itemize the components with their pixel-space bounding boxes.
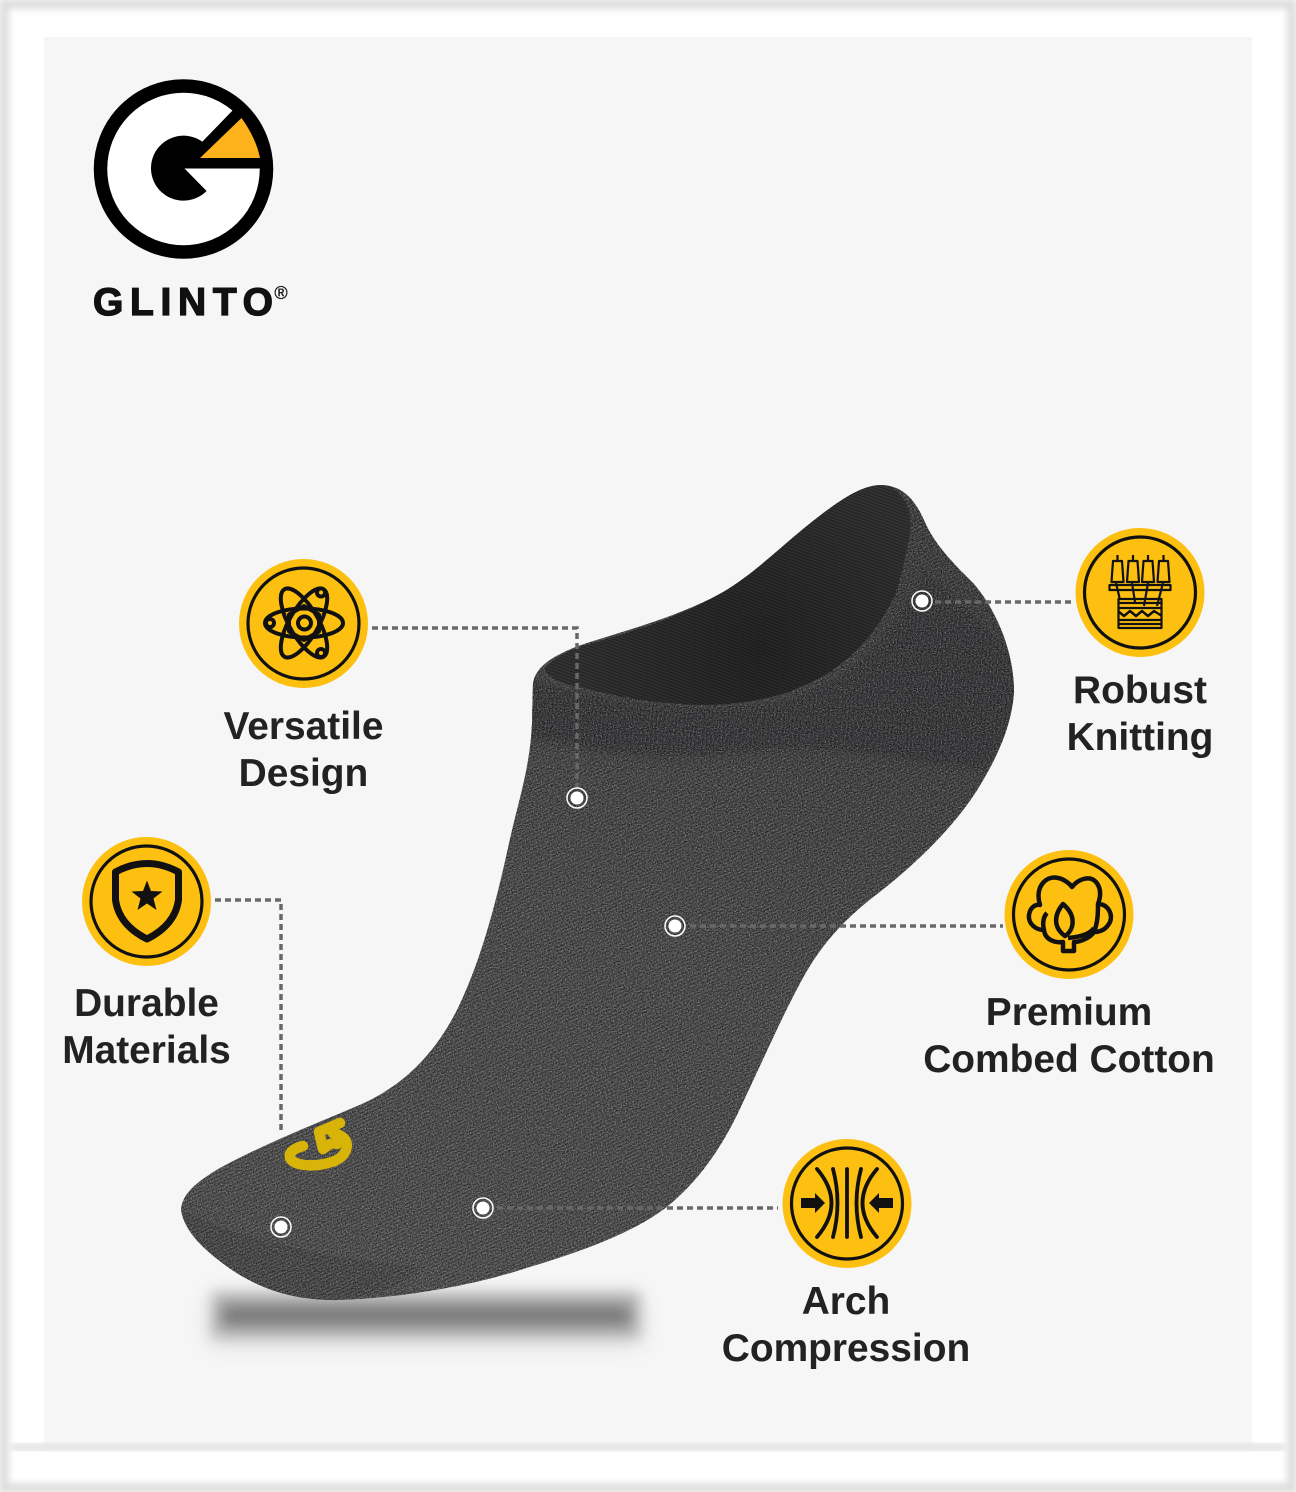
connector: Arch Compression [497,1206,778,1210]
label: Compression [722,1327,970,1370]
icon: atom [239,559,368,688]
sock shadow [210,1292,640,1344]
connector: Premium Combed Cotton [690,924,1003,928]
sock cuff band [530,586,1014,774]
connector: Robust Knitting [935,600,1072,604]
marker dots [271,591,932,1237]
sock knit twill [170,480,1030,1310]
logo wordmark: GLINTO [93,281,273,324]
icon: cotton boll [1004,850,1134,979]
label: Durable [74,982,219,1025]
registered mark: ® [274,283,288,303]
icon: knitting machine [1076,528,1204,657]
feature: Robust Knitting [1067,528,1213,759]
label: Versatile [223,705,384,748]
feature: Durable Materials [62,837,231,1072]
sock opening [544,485,911,705]
label: Design [239,752,368,795]
sock knit texture [170,480,1030,1310]
icon: compression arrows [782,1139,912,1268]
icon: shield with star [82,837,211,966]
sock logo [290,1123,347,1165]
logo: Glinto [93,86,288,324]
label: Premium [986,991,1152,1034]
label: Materials [62,1029,231,1072]
connector: Versatile Design [372,628,577,790]
feature: Versatile Design [223,559,384,795]
label: Robust [1073,669,1207,712]
dot: Robust Knitting [912,591,932,611]
label: Knitting [1067,716,1213,759]
dot: Premium Combed Cotton [665,916,685,936]
logo mark [100,86,266,252]
dot: Arch Compression [473,1198,493,1218]
feature: Arch Compression [722,1139,970,1370]
connector: Durable Materials [215,900,281,1132]
label: Arch [802,1280,890,1323]
toe seam shading [181,1210,420,1300]
sock illustration [170,480,1030,1310]
feature: Premium Combed Cotton [923,850,1215,1081]
dot: Versatile Design [567,788,587,808]
label: Combed Cotton [923,1038,1215,1081]
dot: Durable Materials [271,1217,291,1237]
